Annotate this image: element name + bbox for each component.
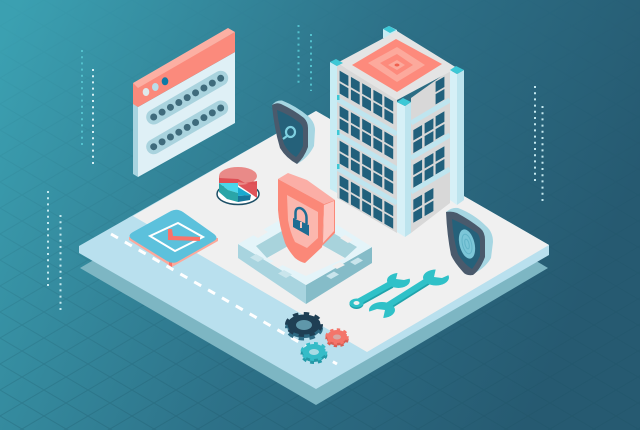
platform xyxy=(79,111,549,405)
outer notches xyxy=(253,229,353,269)
padlock icon xyxy=(293,208,309,236)
back pillar xyxy=(383,26,397,38)
left wall xyxy=(337,63,397,233)
gear: teal xyxy=(302,344,326,362)
roof helipad xyxy=(352,39,442,92)
right windows xyxy=(413,77,444,223)
window control dots xyxy=(143,77,168,96)
platform base blue xyxy=(79,111,549,389)
salmon lock shield xyxy=(278,173,335,263)
courtyard floor xyxy=(267,236,345,276)
floor beams xyxy=(337,99,450,203)
gear: dark xyxy=(288,314,320,338)
fingerprint xyxy=(456,228,478,260)
roof xyxy=(337,31,457,100)
left pillar xyxy=(330,62,337,193)
castle fortress wall xyxy=(238,205,372,304)
wrenches xyxy=(350,268,451,319)
gear: salmon xyxy=(327,330,347,346)
right pillar xyxy=(450,70,457,205)
checklist tile xyxy=(129,210,218,267)
password field 1 xyxy=(154,78,221,117)
check mark xyxy=(168,229,200,241)
wrench 2 xyxy=(368,268,451,319)
left windows xyxy=(340,71,393,229)
password field 2 xyxy=(154,108,221,147)
wrench 1 xyxy=(350,271,412,309)
dotted vertical lines xyxy=(48,25,542,311)
pie chart xyxy=(217,167,259,204)
magnifier shield xyxy=(272,100,315,164)
merlon steps xyxy=(250,254,363,279)
right wall xyxy=(411,70,450,233)
office building xyxy=(330,26,464,237)
magnifier icon xyxy=(283,127,295,139)
inner back walls xyxy=(256,217,357,258)
beam end caps xyxy=(337,95,340,169)
dashed road line xyxy=(111,234,337,364)
front pillar xyxy=(397,102,405,237)
fingerprint shield xyxy=(446,208,493,275)
browser window with password fields xyxy=(133,28,235,177)
platform white surface xyxy=(133,111,549,352)
checkbox outline xyxy=(150,223,203,251)
platform shadow layer xyxy=(80,130,548,405)
